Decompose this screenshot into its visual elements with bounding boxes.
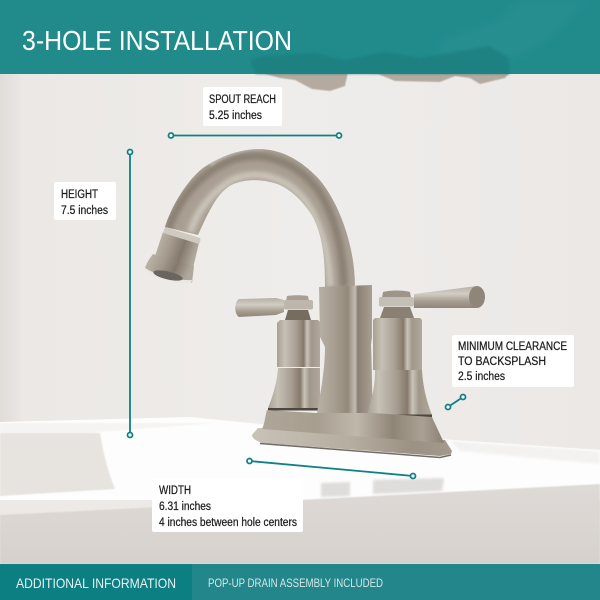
sink counter <box>0 417 600 500</box>
footer note: POP-UP DRAIN ASSEMBLY INCLUDED <box>208 578 383 590</box>
height dimension line <box>128 150 132 438</box>
right handle cap <box>379 290 414 318</box>
rock shadow behind header <box>258 70 512 91</box>
wall background <box>0 0 600 470</box>
left handle <box>235 295 320 410</box>
counter back band <box>450 441 600 464</box>
height callout <box>54 150 132 438</box>
width label: 6.31 inches <box>159 501 211 513</box>
spout reach dimension line <box>168 133 342 138</box>
clearance label <box>452 335 574 387</box>
left handle lever <box>235 298 284 317</box>
right handle lever <box>414 286 477 308</box>
base shadow line <box>260 444 451 458</box>
base top slab <box>262 410 444 443</box>
sink basin <box>0 417 600 564</box>
faucet base <box>252 410 452 458</box>
left handle cap <box>284 295 313 320</box>
title: 3-HOLE INSTALLATION <box>22 25 292 56</box>
nozzle rim <box>145 268 192 284</box>
width dimension line <box>247 458 416 478</box>
faucet <box>145 148 485 458</box>
nozzle collar <box>163 227 200 244</box>
faucet spout <box>165 148 355 287</box>
clearance label: MINIMUM CLEARANCE <box>458 341 567 353</box>
header band <box>0 0 600 74</box>
spout reach label: SPOUT REACH <box>209 94 276 106</box>
nozzle body <box>155 232 199 268</box>
width label: WIDTH <box>159 485 191 497</box>
width label <box>152 479 303 532</box>
right handle body <box>367 318 432 417</box>
spout reach callout <box>168 87 342 138</box>
spout nozzle <box>145 227 200 284</box>
footer heading: ADDITIONAL INFORMATION <box>16 575 176 591</box>
rock shadow through header <box>250 46 510 74</box>
clearance dimension line <box>446 394 466 410</box>
center body <box>317 285 373 413</box>
right handle <box>367 286 485 417</box>
spout reach label: 5.25 inches <box>209 110 262 122</box>
left handle body <box>268 320 320 410</box>
nozzle flange <box>145 254 194 283</box>
upper right rock tint <box>440 0 585 60</box>
spout reach label <box>203 87 282 126</box>
basin interior <box>0 433 115 496</box>
footer band <box>0 564 600 600</box>
nozzle aerator <box>152 268 184 283</box>
height label <box>54 182 116 220</box>
faucet reflection <box>321 478 444 497</box>
width label: 4 inches between hole centers <box>159 517 297 529</box>
height label: 7.5 inches <box>61 205 108 217</box>
clearance label: TO BACKSPLASH <box>458 356 546 368</box>
footer heading <box>0 564 192 600</box>
height label: HEIGHT <box>61 189 98 201</box>
back rim of sink <box>0 423 215 433</box>
backsplash clearance callout <box>446 335 574 410</box>
base lip <box>252 428 452 456</box>
sink front face <box>0 484 600 564</box>
clearance label: 2.5 inches <box>458 371 505 383</box>
width callout <box>152 458 416 532</box>
